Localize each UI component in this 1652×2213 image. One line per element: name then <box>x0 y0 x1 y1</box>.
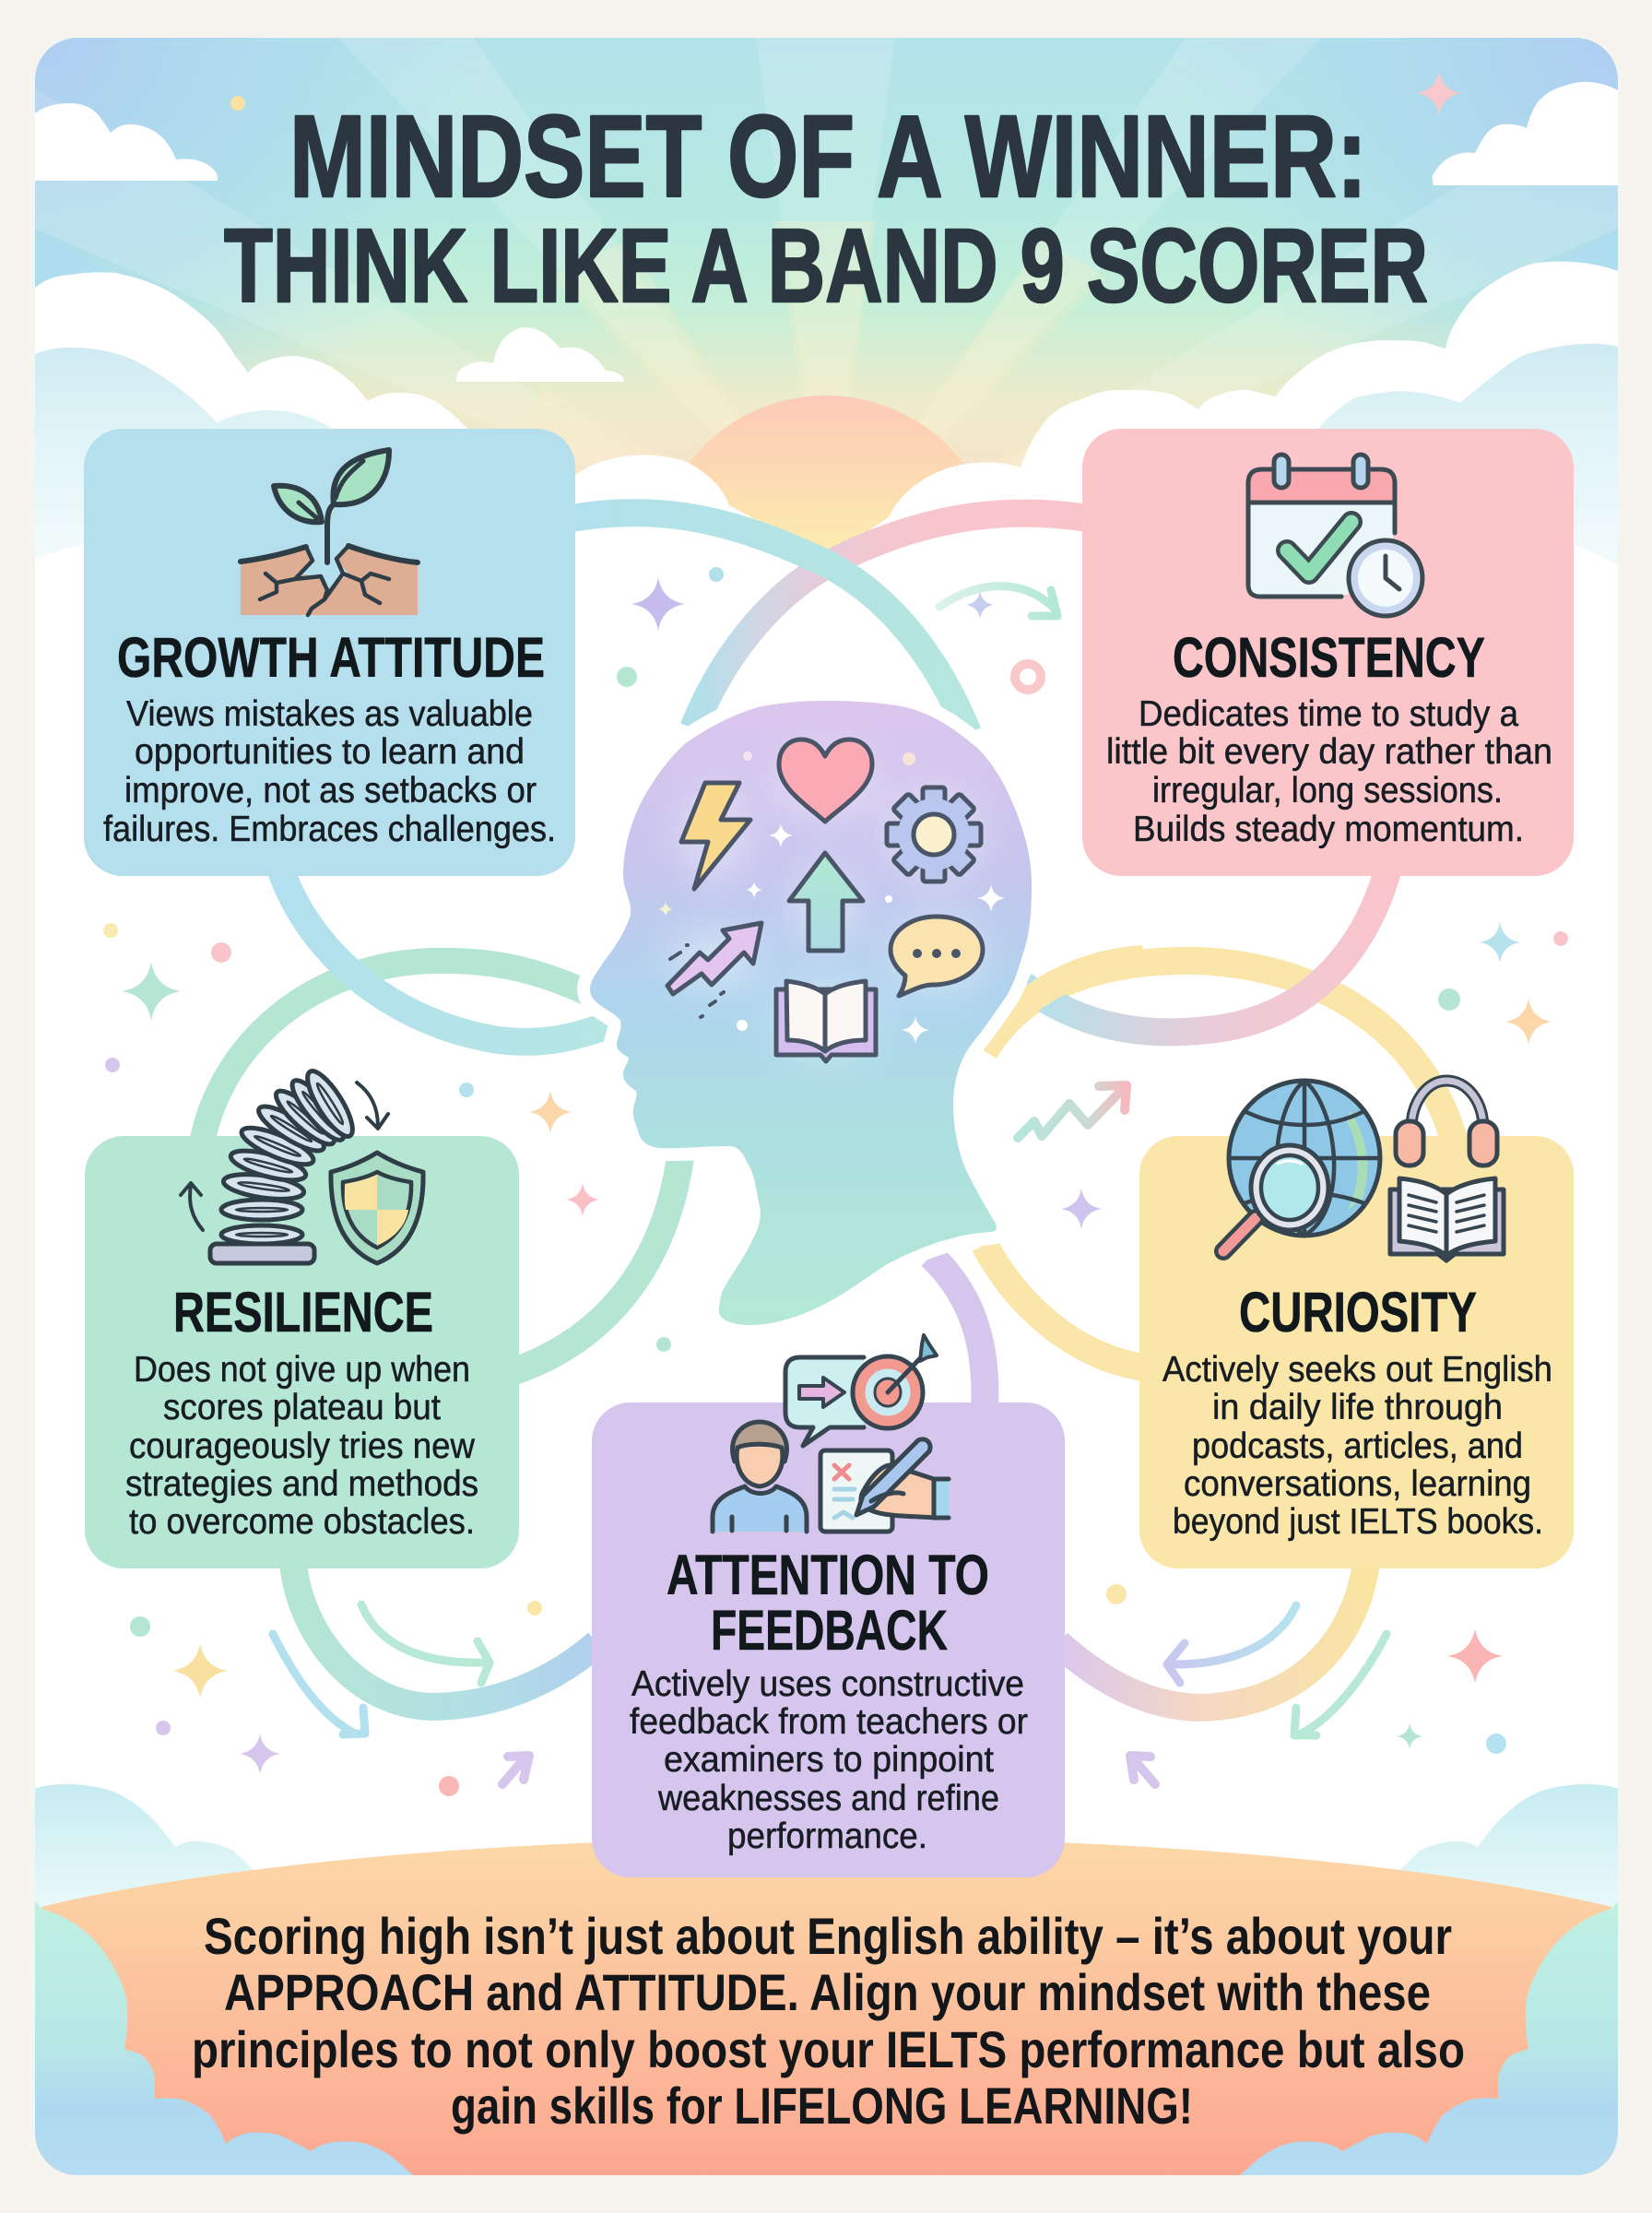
sun <box>690 396 964 550</box>
cloud: small centre <box>456 327 624 382</box>
icon: rising zigzag arrow <box>667 923 761 1017</box>
body text <box>125 1350 478 1542</box>
arrow: lower left green <box>361 1604 490 1683</box>
ribbon: yellow-purple lower right <box>1058 1563 1366 1708</box>
heading <box>667 1544 989 1662</box>
body text: performance. <box>727 1817 927 1856</box>
body text: Does not give up when <box>134 1350 470 1390</box>
body text <box>630 1664 1028 1856</box>
body text: Dedicates time to study a <box>1139 694 1518 734</box>
ribbon: purple from attention to head <box>931 1256 985 1411</box>
body text: opportunities to learn and <box>135 732 525 772</box>
body text: podcasts, articles, and <box>1192 1426 1523 1466</box>
panel: curiosity <box>1139 1081 1574 1568</box>
ribbon: blue under growth <box>281 871 613 1042</box>
body text: beyond just IELTS books. <box>1173 1502 1543 1542</box>
body text: feedback from teachers or <box>630 1702 1028 1742</box>
icon: spring and shield <box>181 1065 423 1263</box>
body text: failures. Embraces challenges. <box>103 810 556 849</box>
ribbon: blue to head top <box>572 513 968 733</box>
banner text: gain skills for LIFELONG LEARNING! <box>451 2077 1193 2135</box>
heading: ATTENTION TO <box>667 1544 989 1606</box>
icon: sprout in cracked soil <box>241 450 418 615</box>
arrow: zigzag growth <box>1018 1085 1127 1138</box>
body text <box>103 694 556 849</box>
arrow: top right teal <box>939 586 1057 616</box>
ribbon: green-blue lower left <box>293 1563 597 1707</box>
body text: scores plateau but <box>163 1388 441 1427</box>
icon: student, target and feedback <box>713 1335 949 1532</box>
head silhouette <box>590 701 1032 1325</box>
cloud: banner right <box>1240 1901 1618 2175</box>
panel: growth attitude <box>84 429 575 876</box>
ribbons connecting panels <box>202 513 1455 1708</box>
glow behind head icons <box>668 751 983 1054</box>
icon: lightning <box>681 783 750 889</box>
body text: Actively seeks out English <box>1162 1350 1552 1390</box>
head sparkles <box>658 751 1005 1044</box>
title <box>224 91 1428 324</box>
cloud: pale inner right <box>1318 344 1618 564</box>
ribbon: yellow to curiosity <box>985 1245 1143 1367</box>
body text: to overcome obstacles. <box>129 1502 475 1542</box>
bottom banner <box>35 1838 1618 2175</box>
body text: Views mistakes as valuable <box>126 694 533 734</box>
body text: conversations, learning <box>1184 1464 1531 1504</box>
banner text: principles to not only boost your IELTS performance but also <box>192 2020 1465 2078</box>
ribbon: pink to head top <box>693 514 1088 728</box>
arrow: lower right blue <box>1167 1605 1296 1683</box>
small arrows and decorations <box>273 586 1386 1784</box>
icon: globe, magnifier, headphones and book <box>1223 1081 1504 1260</box>
arrow: lower right green <box>1294 1634 1386 1735</box>
ribbon: green from resilience over to head <box>202 961 590 1143</box>
heading: CONSISTENCY <box>1173 626 1485 689</box>
panel: attention to feedback <box>592 1335 1065 1877</box>
arrow: lower left purple <box>502 1756 529 1784</box>
body text <box>1162 1350 1552 1542</box>
cloud: large white cloud band <box>35 262 1618 702</box>
cloud: bottom right pale <box>1398 1784 1619 1913</box>
banner text: Scoring high isn’t just about English ability – it’s about your <box>204 1907 1452 1965</box>
icon: speech bubble <box>891 917 983 996</box>
cloud: pale inner left <box>35 348 331 558</box>
heading: FEEDBACK <box>711 1599 948 1662</box>
ribbon: pink under consistency <box>1023 871 1387 1032</box>
ribbon: green to head bottom <box>514 1157 680 1371</box>
ribbon: yellow from curiosity over head <box>985 961 1455 1143</box>
body text: Builds steady momentum. <box>1133 810 1524 849</box>
banner text: APPROACH and ATTITUDE. Align your mindset with these <box>224 1963 1431 2021</box>
cloud: banner left <box>35 1901 413 2175</box>
panel: consistency <box>1082 429 1574 876</box>
icon: heart <box>779 740 872 822</box>
body text: improve, not as setbacks or <box>124 771 537 811</box>
icon: calendar and clock <box>1248 455 1422 616</box>
body text: in daily life through <box>1212 1388 1503 1427</box>
body text <box>1106 694 1552 849</box>
arrow: lower right purple <box>1130 1756 1155 1784</box>
body text: strategies and methods <box>125 1464 478 1504</box>
body text: irregular, long sessions. <box>1152 771 1503 811</box>
icon: gear <box>887 787 981 882</box>
sparkles and dots <box>103 71 1568 1796</box>
heading: CURIOSITY <box>1239 1281 1477 1343</box>
title: MINDSET OF A WINNER: <box>289 91 1367 221</box>
body text: weaknesses and refine <box>657 1779 999 1818</box>
body text: courageously tries new <box>129 1426 476 1466</box>
cloud: bottom left pale <box>34 1784 255 1913</box>
arrow: lower left blue <box>273 1634 365 1734</box>
panel: resilience <box>85 1065 519 1568</box>
cloud: top left <box>35 103 218 181</box>
body text: Actively uses constructive <box>631 1664 1024 1704</box>
heading: GROWTH ATTITUDE <box>117 626 545 689</box>
cloud: top right <box>1433 82 1618 185</box>
ribbon: yellow overlap near head <box>985 959 1143 1051</box>
icon: open book <box>776 981 876 1061</box>
icon: up arrow <box>789 853 863 951</box>
body text: little bit every day rather than <box>1106 732 1552 772</box>
heading: RESILIENCE <box>173 1281 433 1343</box>
banner text <box>192 1907 1465 2135</box>
body text: examiners to pinpoint <box>664 1740 994 1780</box>
